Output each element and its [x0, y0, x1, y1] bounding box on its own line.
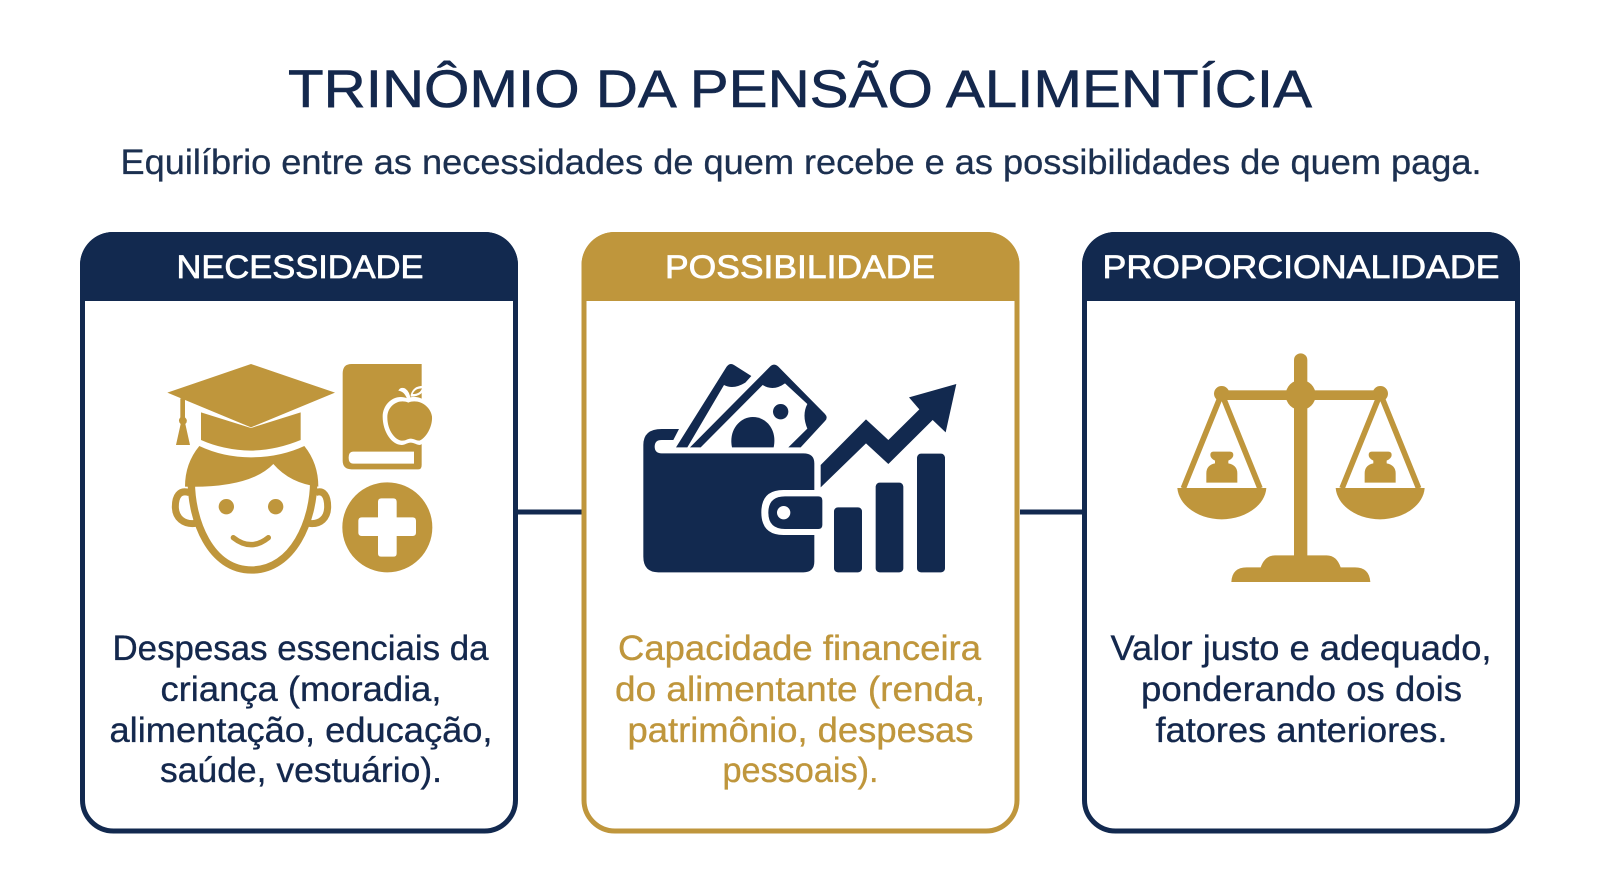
panel: possibilidade	[582, 232, 1020, 831]
cap base	[201, 412, 301, 451]
text: possibilidade description: do alimentante (renda,	[615, 670, 985, 709]
left weight	[1206, 452, 1237, 483]
text: necessidade description: saúde, vestuário).	[160, 751, 442, 790]
book	[343, 364, 422, 469]
text: proporcionalidade description: ponderando os dois	[1141, 670, 1462, 709]
eyes	[219, 499, 234, 514]
left ear	[175, 492, 196, 524]
chart bars	[834, 507, 862, 572]
panel header: possibilidade: POSSIBILIDADE	[665, 249, 935, 285]
text: necessidade description: Despesas essenciais da	[112, 629, 489, 668]
bill details	[773, 404, 788, 419]
front bill	[690, 365, 827, 447]
left pan strings	[1183, 394, 1260, 488]
subtitle: Equilíbrio entre as necessidades de quem recebe e as possibilidades de quem paga.	[120, 143, 1482, 182]
panel: necessidade	[80, 232, 518, 831]
cap top	[167, 364, 335, 427]
health cross	[358, 498, 416, 557]
text: proporcionalidade description	[1110, 629, 1492, 750]
hair	[185, 446, 318, 487]
apple	[383, 397, 434, 445]
post	[1294, 353, 1307, 560]
connector: possibilidade to proporcionalidade	[1020, 510, 1083, 514]
panel header: proporcionalidade	[1082, 232, 1520, 301]
panel header: necessidade	[80, 232, 518, 301]
text: possibilidade description: pessoais).	[722, 751, 878, 790]
panel header: possibilidade	[582, 232, 1020, 301]
text: necessidade description: alimentação, educação,	[110, 711, 492, 750]
icon: wallet with money and growth chart	[643, 364, 956, 572]
wallet body	[643, 429, 814, 572]
text: necessidade description: criança (moradia,	[160, 670, 442, 709]
panel: proporcionalidade	[1082, 232, 1520, 831]
right pan strings	[1342, 394, 1419, 488]
text: possibilidade description: patrimônio, despesas	[628, 711, 974, 750]
right pan	[1336, 488, 1425, 519]
base	[1231, 555, 1370, 582]
text: proporcionalidade description: Valor justo e adequado,	[1110, 629, 1492, 668]
right ear	[309, 492, 328, 524]
text: possibilidade description	[615, 629, 985, 790]
text: necessidade description	[110, 629, 492, 790]
growth arrow	[821, 384, 956, 487]
text: proporcionalidade description: fatores anteriores.	[1156, 711, 1448, 750]
face outline	[191, 482, 314, 570]
smile	[233, 538, 268, 545]
wallet clasp	[768, 496, 822, 529]
panel header: proporcionalidade: PROPORCIONALIDADE	[1102, 249, 1500, 285]
connector: necessidade to possibilidade	[518, 510, 582, 514]
title: TRINÔMIO DA PENSÃO ALIMENTÍCIA	[288, 60, 1313, 119]
icon: child with graduation cap, book and health cross	[167, 364, 434, 572]
icon: balance scale	[1177, 353, 1425, 582]
panel header: necessidade: NECESSIDADE	[176, 249, 424, 285]
text: possibilidade description: Capacidade financeira	[618, 629, 982, 668]
beam	[1222, 390, 1380, 400]
back bill	[676, 364, 751, 447]
health circle	[342, 482, 432, 572]
left pan	[1177, 488, 1266, 519]
right weight	[1365, 452, 1396, 483]
tassel	[176, 398, 190, 445]
